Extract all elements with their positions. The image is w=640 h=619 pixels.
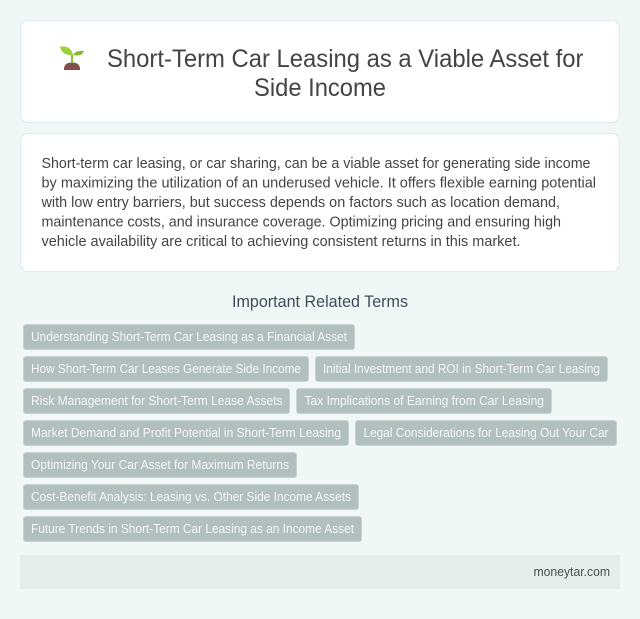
text block: description: maintenance costs, and insurance coverage. Optimizing pricing and ensuring high [42,214,561,230]
tag [316,356,608,382]
tag: Understanding Short-Term Car Leasing as a Financial Asset [31,330,347,344]
tag: How Short-Term Car Leases Generate Side Income [31,362,301,376]
tag [24,324,354,350]
tag: Market Demand and Profit Potential in Short-Term Leasing [31,426,341,440]
text block: description: by maximizing the utilization of an underused vehicle. It offers flexible earning potential [42,176,596,192]
panel: description card [20,134,620,272]
tag [24,452,296,478]
text block: description: Short-term car leasing, or car sharing, can be a viable asset for generating side income [42,156,590,172]
tag: Risk Management for Short-Term Lease Assets [31,394,282,408]
text block: description [41,156,596,250]
footer [20,555,620,589]
tag: Legal Considerations for Leasing Out Your Car [364,426,608,440]
icon: sprout [60,46,84,70]
tag [296,388,552,414]
text block: description: vehicle availability are critical to achieving consistent returns in this market. [42,234,520,250]
tag: Tax Implications of Earning from Car Leasing [304,394,544,408]
tag [24,516,362,542]
tag [356,420,616,446]
tag [24,420,348,446]
title: Side Income [254,75,386,102]
tag [24,388,290,414]
tag: Future Trends in Short-Term Car Leasing as an Income Asset [31,522,354,536]
tag: Initial Investment and ROI in Short-Term Car Leasing [323,362,600,376]
tag [24,356,308,382]
panel: title card [20,20,620,122]
tag [24,484,358,510]
tag: Cost-Benefit Analysis: Leasing vs. Other Side Income Assets [31,490,351,504]
title [107,46,584,102]
title: Short-Term Car Leasing as a Viable Asset for [107,46,584,73]
heading: important related terms: Important Related Terms [232,292,408,311]
text block: description: with low entry barriers, but success depends on factors such as location demand, [41,195,560,211]
tag: Optimizing Your Car Asset for Maximum Returns [31,458,289,472]
footer: moneytar.com [534,565,610,579]
tag list [24,324,616,542]
